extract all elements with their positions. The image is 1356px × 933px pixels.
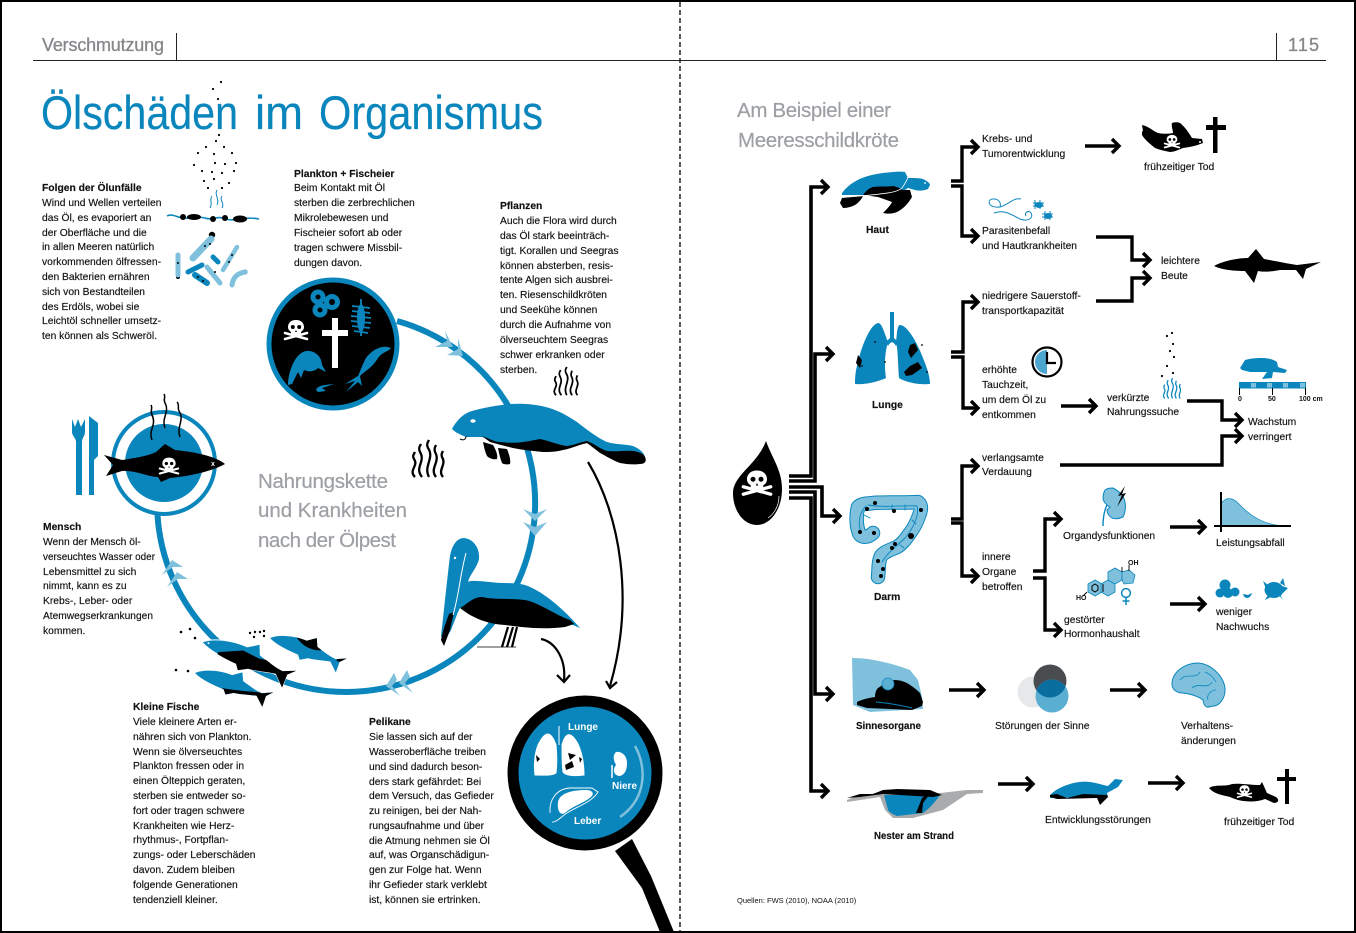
text: Pflanzen: sterben.: [500, 365, 537, 376]
subtitle: Meeresschildkröte: Meeresschildkröte: [738, 129, 899, 152]
text: Folgen der Ölunfälle: sich von Bestandteilen: [42, 287, 145, 298]
text: Mensch: Lebensmittel zu sich: [43, 567, 137, 578]
text: innere Organe: betroffen: [982, 582, 1023, 593]
text: Folgen der Ölunfälle: Folgen der Ölunfälle: [42, 181, 142, 194]
text: Pelikane: gen zur Folge hat. Wenn: [369, 865, 482, 876]
subtitle: Nahrungskette: und Krankheiten: [258, 499, 407, 522]
icon: Haut turtle: [840, 172, 930, 214]
text: Hormonhaushalt: Hormonhaushalt: [1064, 629, 1140, 640]
icon: manatee: [452, 404, 646, 464]
text: Pelikane: ist, können sie ertrinken.: [369, 895, 481, 906]
text: Nahrungssuche: Nahrungssuche: [1107, 407, 1179, 418]
icon: overlapping senses: [1018, 664, 1068, 712]
icon: dead turtle and cross: [1209, 769, 1296, 804]
title: im: [255, 86, 303, 139]
icon: turtle and scale: [1238, 358, 1323, 403]
text: Pflanzen: tigt. Korallen und Seegras: [500, 246, 618, 257]
text: Verdauung: Verdauung: [982, 467, 1032, 478]
text: Kleine Fische: folgende Generationen: [133, 880, 238, 891]
text: innere Organe: innere: [982, 552, 1011, 563]
section label: Verschmutzung: [42, 35, 164, 55]
text: Organdysfunktionen: Organdysfunktionen: [1063, 531, 1155, 542]
page number: 115: [1288, 35, 1319, 55]
text: Kleine Fische: nähren sich von Plankton.: [133, 732, 252, 743]
arrow: [949, 683, 984, 697]
text: Plankton + Fischeier: Fischeier sofort ab oder: [294, 228, 403, 239]
arrows to leichtere Beute: [1096, 237, 1150, 301]
arrow: [998, 777, 1033, 791]
text: Hormonhaushalt: gestörter: [1064, 615, 1105, 626]
text: Pelikane: die Atmung nehmen sie Öl: [369, 835, 490, 847]
text: Wachstum: verringert: [1248, 432, 1292, 443]
arrow: [1170, 520, 1205, 534]
text: Pflanzen: ten. Riesenschildkröten: [500, 290, 607, 301]
text: Mensch: kommen.: [43, 626, 85, 637]
icon: magnifier with organs: Lunge: [568, 722, 598, 733]
icon: parasites: [989, 199, 1053, 220]
text: Krebs: Tumorentwicklung: [982, 149, 1065, 160]
text: Pflanzen: tente Algen sich ausbrei-: [500, 275, 613, 286]
text: Pflanzen: durch die Aufnahme von: [500, 320, 611, 331]
icon: plate, cutlery and fish: x: [211, 461, 215, 468]
text: Mensch: Krebs-, Leber- oder: [43, 596, 133, 607]
icon: dead turtle with cross: [1142, 117, 1226, 153]
icon: hatchling turtle: [1050, 779, 1123, 805]
text: Nahrungssuche: verkürzte: [1107, 393, 1149, 404]
text: Folgen der Ölunfälle: in allen Meeren natürlich: [42, 242, 154, 253]
text: Pelikane: zu reinigen, bei der Nah-: [369, 806, 482, 817]
icon: plankton circle: [269, 280, 397, 408]
fold line: [679, 2, 681, 931]
arrow: [1110, 683, 1145, 697]
label: Nester am Strand: Nester am Strand: [874, 831, 954, 842]
text: Pelikane: rungsaufnahme und über: [369, 821, 485, 832]
text: Plankton + Fischeier: Plankton + Fischeier: [294, 169, 394, 180]
ring arrow marks: [162, 331, 547, 696]
text: Mensch: Wenn der Mensch öl-: [43, 537, 141, 548]
text: Folgen der Ölunfälle: Leichtöl schneller umsetz-: [42, 316, 161, 327]
icon: fish group: [174, 628, 347, 707]
text: Kleine Fische: tendenziell kleiner.: [133, 895, 218, 906]
icon: hormone molecule: OH: [1128, 560, 1138, 567]
text: Wachstum: Wachstum: [1248, 417, 1296, 428]
text: Entwicklungsstörungen: Entwicklungsstörungen: [1045, 815, 1151, 826]
text: Verhaltensänderungen: änderungen: [1181, 736, 1236, 747]
subtitle: Nahrungskette: Nahrungskette: [258, 470, 388, 493]
text: Folgen der Ölunfälle: das Öl, es evaporiert an: [42, 212, 152, 224]
icon: oil drop with skull: [733, 441, 782, 525]
text: Mensch: Mensch: [43, 522, 81, 533]
bracket: Haut branches: [951, 140, 978, 243]
icon: brain: [1172, 663, 1225, 707]
food chain ring: [158, 321, 547, 696]
icon: Lunge: [855, 312, 930, 384]
text: Pelikane: Wasseroberfläche treiben: [369, 747, 486, 758]
text: innere Organe: Organe: [982, 567, 1017, 578]
text: Mensch: Atemwegserkrankungen: [43, 611, 153, 622]
icon: magnifier with organs: Leber: [574, 816, 601, 827]
text: leichtere Beute: Beute: [1161, 271, 1188, 282]
text: Tauchzeit: entkommen: [982, 410, 1036, 421]
text: Plankton + Fischeier: dungen davon.: [294, 258, 362, 269]
icon: magnifier with organs: Niere: [612, 781, 637, 792]
icon: clock: [1032, 348, 1062, 376]
text: Kleine Fische: Viele kleinere Arten er-: [133, 717, 237, 728]
bracket: Organ branches: [1033, 512, 1061, 637]
text: Folgen der Ölunfälle: des Erdöls, wobei sie: [42, 302, 140, 313]
text: Pelikane: dem Versuch, das Gefieder: [369, 791, 494, 802]
text: Kleine Fische: fort oder tragen schwere: [133, 806, 245, 817]
text: Parasitenbefall: und Hautkrankheiten: [982, 241, 1077, 252]
title: [41, 86, 543, 139]
icon: kidney with lightning: [1103, 486, 1126, 526]
text: Kleine Fische: einen Ölteppich geraten,: [133, 775, 245, 787]
label: frühzeitiger Tod: frühzeitiger Tod: [1144, 162, 1214, 173]
label: Darm: Darm: [874, 592, 900, 603]
text: Folgen der Ölunfälle: ten können als Schweröl.: [42, 331, 157, 342]
text: leichtere Beute: leichtere: [1161, 256, 1200, 267]
icon: nest on the beach: [847, 789, 983, 818]
bracket: Lunge branches: [951, 295, 978, 415]
icon: turtle and scale: 100 cm: [1299, 396, 1323, 403]
label: Haut: Haut: [866, 225, 889, 236]
text: Sauerstoff: niedrigere Sauerstoff-: [982, 291, 1081, 302]
arrow: pelican to magnifier: [541, 639, 570, 682]
arrow: [1085, 139, 1119, 153]
text: Pelikane: auf, was Organschädigun-: [369, 850, 489, 861]
arrows to Wachstum: [1060, 401, 1242, 465]
icon: hormone molecule: [1076, 560, 1138, 605]
text: Tauchzeit: Tauchzeit,: [982, 380, 1028, 391]
text: Krebs: Krebs- und: [982, 134, 1032, 145]
text: Folgen der Ölunfälle: den Bakterien ernähren: [42, 272, 150, 283]
arrow: [1148, 776, 1183, 790]
arrow: [1061, 399, 1096, 413]
arrow: manatee to magnifier: [588, 462, 623, 688]
arrow: [1170, 597, 1205, 611]
text: weniger Nachwuchs: weniger: [1216, 607, 1252, 618]
text: Folgen der Ölunfälle: Wind und Wellen verteilen: [42, 198, 162, 209]
icon: plate, cutlery and fish: [72, 394, 225, 514]
icon: shark: [1214, 249, 1321, 283]
text: Kleine Fische: davon. Zudem bleiben: [133, 865, 235, 876]
text: Pflanzen: ölverseuchtem Seegras: [500, 335, 608, 346]
title: Ölschäden: [41, 86, 238, 139]
text: Kleine Fische: Plankton fressen oder in: [133, 761, 244, 772]
text: Tauchzeit: erhöhte: [982, 365, 1017, 376]
text: Kleine Fische: rhythmus-, Fortpflan-: [133, 835, 229, 846]
chart: Leistungsabfall curve: [1214, 492, 1291, 532]
label: frühzeitiger Tod: frühzeitiger Tod: [1224, 817, 1294, 828]
text: Pflanzen: Pflanzen: [500, 201, 542, 212]
text: Pflanzen: können absterben, resis-: [500, 261, 613, 272]
icon: evaporation and bacteria: [167, 81, 259, 285]
text: weniger Nachwuchs: Nachwuchs: [1216, 622, 1269, 633]
text: Pelikane: Pelikane: [369, 717, 411, 728]
icon: magnifier with organs: [513, 701, 674, 932]
text: Parasitenbefall: Parasitenbefall: [982, 226, 1050, 237]
label: Sinnesorgane: Sinnesorgane: [856, 721, 921, 732]
text: Kleine Fische: Kleine Fische: [133, 702, 200, 713]
icon: eggs and hatchling: [1216, 578, 1288, 600]
icon: Darm: [857, 501, 923, 578]
icon: turtle and scale: 0: [1238, 396, 1242, 403]
text: Tauchzeit: um dem Öl zu: [982, 394, 1046, 406]
icon: Sinnesorgane: [852, 658, 923, 712]
text: Verhaltensänderungen: Verhaltens-: [1181, 721, 1233, 732]
text: Pelikane: ihr Gefieder stark verklebt: [369, 880, 487, 891]
label: Lunge: Lunge: [872, 400, 903, 411]
text: Pelikane: Sie lassen sich auf der: [369, 732, 473, 743]
text: Pflanzen: Auch die Flora wird durch: [500, 216, 617, 227]
text: Pflanzen: und Seekühe können: [500, 305, 598, 316]
header rule: [33, 33, 1326, 60]
text: Mensch: nimmt, kann es zu: [43, 581, 127, 592]
icon: seaweed right: [554, 367, 578, 395]
text: Plankton + Fischeier: sterben die zerbrechlichen: [294, 198, 415, 209]
text: Folgen der Ölunfälle: der Oberfläche und die: [42, 228, 147, 239]
icon: bubbles and seaweed: [1161, 332, 1181, 398]
title: Organismus: [319, 86, 543, 139]
plankton specks: [175, 628, 265, 672]
icon: seaweed left: [413, 440, 443, 477]
text: Plankton + Fischeier: Mikrolebewesen und: [294, 213, 389, 224]
trunk lines and main arrows: [789, 180, 840, 798]
text: Plankton + Fischeier: Beim Kontakt mit Öl: [294, 182, 385, 194]
subtitle: Meeresschildkröte: Am Beispiel einer: [737, 99, 891, 122]
text: Kleine Fische: zungs- oder Leberschäden: [133, 850, 256, 861]
text: Folgen der Ölunfälle: vorkommenden ölfressen-: [42, 257, 161, 268]
text: Verdauung: verlangsamte: [982, 453, 1044, 464]
subtitle: Nahrungskette: nach der Ölpest: [258, 529, 396, 552]
text: Pelikane: und sind dadurch beson-: [369, 762, 482, 773]
text: Störungen der Sinne: Störungen der Sinne: [995, 721, 1090, 732]
text: Pflanzen: das Öl stark beeinträch-: [500, 230, 609, 242]
text: Mensch: verseuchtes Wasser oder: [43, 552, 156, 563]
icon: hormone molecule: HO: [1076, 595, 1087, 602]
text: Kleine Fische: Wenn sie ölverseuchtes: [133, 747, 242, 758]
label: Leistungsabfall: Leistungsabfall: [1216, 538, 1285, 549]
text: Kleine Fische: sterben sie entweder so-: [133, 791, 246, 802]
text: Sauerstoff: transportkapazität: [982, 306, 1064, 317]
bracket: Darm branches: [951, 459, 978, 583]
text: Plankton + Fischeier: tragen schwere Missbil-: [294, 243, 402, 254]
icon: turtle and scale: 50: [1268, 396, 1276, 403]
text: Kleine Fische: Krankheiten wie Herz-: [133, 821, 234, 832]
icon: pelican: [441, 538, 580, 647]
sources: Quellen: FWS (2010), NOAA (2010): [737, 896, 857, 905]
text: Pflanzen: schwer erkranken oder: [500, 350, 605, 361]
text: Pelikane: ders stark gefährdet: Bei: [369, 777, 481, 788]
